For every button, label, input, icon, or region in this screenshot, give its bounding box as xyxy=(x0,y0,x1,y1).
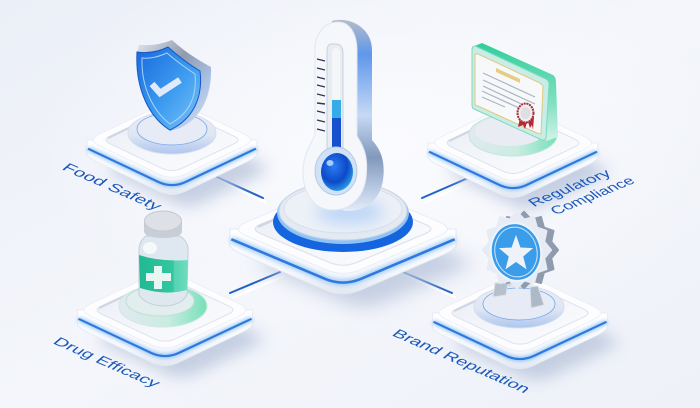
platform xyxy=(87,103,266,206)
bulb xyxy=(315,147,357,195)
label: regulatory: Regulatory xyxy=(525,167,616,210)
glass disc xyxy=(128,112,216,154)
icon: star badge xyxy=(483,212,558,308)
icon: bottle xyxy=(139,211,188,306)
glass disc xyxy=(474,286,564,328)
panel: drug efficacy xyxy=(49,211,262,391)
connector lines xyxy=(217,177,471,297)
bottle cap xyxy=(144,211,182,238)
glass disc xyxy=(469,114,557,156)
tube xyxy=(327,44,343,158)
platform xyxy=(428,106,608,209)
glass disc with blue ring xyxy=(273,182,413,252)
platform xyxy=(77,272,262,377)
label: compliance: Compliance xyxy=(547,175,639,218)
thermometer side xyxy=(330,20,384,211)
thermometer face xyxy=(303,22,367,210)
glass disc xyxy=(119,285,207,327)
label: food safety: Food Safety xyxy=(58,161,166,214)
panel: brand reputation xyxy=(388,212,617,396)
certificate paper xyxy=(475,54,543,134)
icon: shield xyxy=(137,40,211,131)
label: brand reputation: Brand Reputation xyxy=(388,327,533,396)
label: drug efficacy: Drug Efficacy xyxy=(49,335,164,391)
cross xyxy=(146,266,171,289)
panel: food safety xyxy=(58,40,267,214)
temperature ticks xyxy=(317,59,325,131)
platform xyxy=(230,185,469,307)
panel: center thermometer xyxy=(230,20,469,307)
icon: certificate xyxy=(472,43,558,141)
icon: thermometer xyxy=(303,20,384,211)
icon: seal xyxy=(518,104,534,130)
platform xyxy=(432,275,617,380)
panel: regulatory compliance xyxy=(428,43,639,218)
